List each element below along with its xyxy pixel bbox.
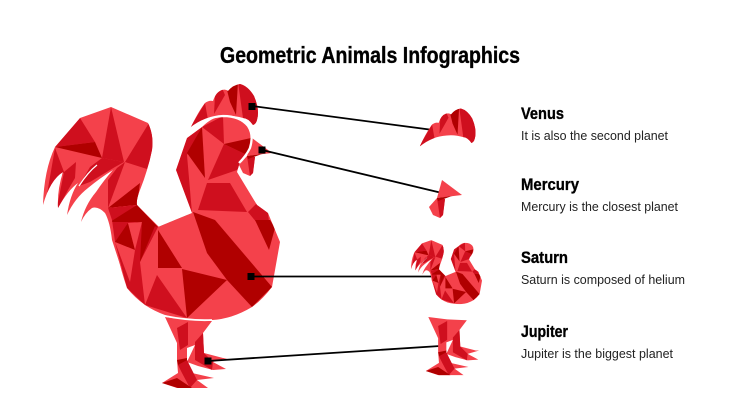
connector: Saturn <box>248 273 434 280</box>
rooster illustration <box>40 80 290 388</box>
text block: Jupiter: Jupiter is the biggest planet <box>521 347 674 361</box>
text block: Saturn: Saturn <box>521 249 568 267</box>
text block: Jupiter <box>521 323 674 361</box>
connector: Jupiter <box>204 346 440 364</box>
text block: Mercury: Mercury is the closest planet <box>521 200 679 214</box>
text block: Saturn: Saturn is composed of helium <box>521 273 685 287</box>
text block: Jupiter: Jupiter <box>521 323 568 341</box>
text block: Mercury <box>521 176 679 214</box>
text block: Mercury: Mercury <box>521 176 580 194</box>
piece: legs <box>426 317 479 375</box>
title: Geometric Animals Infographics <box>220 42 520 68</box>
text block: Venus <box>521 105 669 143</box>
text block: Saturn <box>521 249 685 287</box>
piece: comb <box>416 105 481 151</box>
piece: beak <box>429 180 462 218</box>
text block: Venus: It is also the second planet <box>521 129 669 143</box>
text block: Venus: Venus <box>521 105 564 123</box>
piece: body <box>410 238 485 306</box>
connector: Venus <box>248 103 433 130</box>
connector: Mercury <box>258 146 442 193</box>
